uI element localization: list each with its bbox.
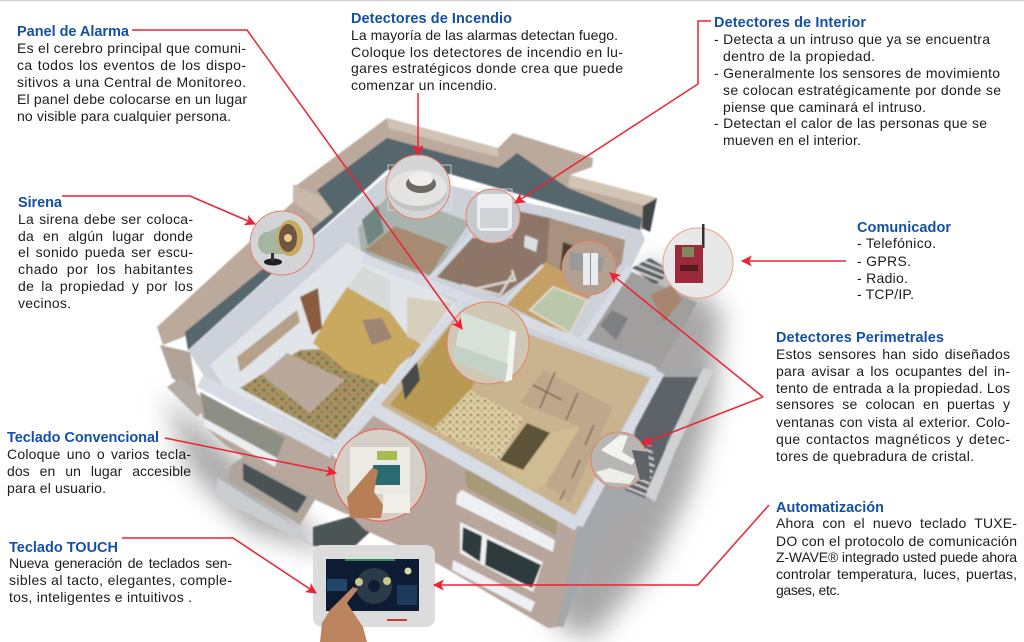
text: comunicador: - Telefónico. <box>857 235 936 251</box>
arrow: teclado touch <box>122 538 316 593</box>
text: sirena: La sirena debe ser coloca- <box>18 211 193 227</box>
text: teclado convencional: Teclado Convencional <box>7 430 159 446</box>
terrace on the right side <box>548 368 714 627</box>
text: automatizacion: gases, etc. <box>776 582 840 598</box>
text: sirena: Sirena <box>18 195 63 211</box>
callout: siren <box>250 211 314 275</box>
text: sirena: da en algún lugar donde <box>18 228 193 244</box>
lower floor left wing <box>160 345 372 546</box>
stair room <box>437 210 625 300</box>
text: detectores de incendio: Coloque los detectores de incendio en lu- <box>351 44 623 60</box>
text: detectores perimetrales: sensores se colocan en puertas y <box>776 396 1010 412</box>
callout: upper perimeter sensor <box>562 241 616 295</box>
text: detectores perimetrales: Detectores Perimetrales <box>776 330 944 346</box>
text: detectores perimetrales: tores de quebradura de cristal. <box>776 448 974 464</box>
text: panel de alarma: El panel debe colocarse en un lugar <box>17 91 247 107</box>
text: detectores de interior: se colocan estratégicamente por donde se <box>723 82 1001 98</box>
text: detectores de interior: Detectores de Interior <box>714 15 866 31</box>
text: panel de alarma: sitivos a una Central de Monitoreo. <box>17 74 246 90</box>
text: teclado convencional <box>7 430 191 496</box>
text: teclado touch: Teclado TOUCH <box>9 540 118 556</box>
callout: window contact sensor <box>591 432 650 488</box>
arrow: panel de alarma <box>132 30 462 329</box>
house drop shadows <box>165 260 722 640</box>
text: panel de alarma: no visible para cualquier persona. <box>17 108 231 124</box>
callout: alarm panel <box>447 302 529 384</box>
text: panel de alarma: Es el cerebro principal que comuni- <box>17 40 246 56</box>
text: teclado convencional: para el usuario. <box>7 480 106 496</box>
text: automatizacion: DO con el protocolo de comunicación <box>776 533 1017 549</box>
dark roof strip <box>185 138 642 350</box>
text: comunicador: - GPRS. <box>857 253 911 269</box>
text: comunicador: Comunicador <box>857 220 951 236</box>
text: detectores perimetrales: que contactos magnéticos y detec- <box>776 431 1010 447</box>
text: sirena: de la propiedad y por los <box>18 278 193 294</box>
green bed room <box>507 262 590 335</box>
text: sirena: el sonido pueda ser escu- <box>18 244 193 260</box>
text: teclado convencional: Coloque uno o varios tecla- <box>7 446 191 462</box>
text: detectores perimetrales: Estos sensores han sido diseñados <box>776 346 1010 362</box>
text: teclado convencional: dos en un lugar accesible <box>7 463 191 479</box>
lower floor front wall with windows <box>340 412 578 628</box>
text: detectores de interior: - Detecta a un intruso que ya se encuentra <box>714 31 990 47</box>
interior and exterior wall tops <box>200 230 660 525</box>
text: sirena: vecinos. <box>18 295 71 311</box>
text: automatizacion: Z-WAVE® integrado usted puede ahora <box>776 549 1017 565</box>
text: detectores de incendio: gares estratégicos donde crea que puede <box>351 60 623 76</box>
text: comunicador <box>857 220 951 302</box>
touch keypad <box>313 545 435 642</box>
text: comunicador: - TCP/IP. <box>857 286 914 302</box>
balcony <box>587 258 697 368</box>
arrow: automatizacion <box>434 505 769 585</box>
bedroom <box>210 243 458 442</box>
text: sirena: chado por los habitantes <box>18 261 193 277</box>
callout: conventional keypad <box>334 429 426 521</box>
text: automatizacion <box>776 500 1017 598</box>
cutaway house illustration <box>157 118 714 628</box>
text: sirena <box>18 195 193 311</box>
text: automatizacion: Ahora con el nuevo teclado TUXE- <box>776 515 1017 531</box>
upper floor wall ring <box>188 172 660 527</box>
text: panel de alarma: ca todos los eventos de los dispo- <box>17 57 246 73</box>
text: detectores de interior: - Detectan el calor de las personas que se <box>714 115 987 131</box>
arrows: detectores perimetrales <box>610 273 763 444</box>
text: detectores de incendio <box>351 11 623 93</box>
text: detectores de incendio: La mayoría de las alarmas detectan fuego. <box>351 27 618 43</box>
text: detectores de incendio: Detectores de Incendio <box>351 11 512 27</box>
text: comunicador: - Radio. <box>857 270 908 286</box>
arrow: teclado convencional <box>165 438 336 473</box>
callout: fire detector <box>386 155 451 219</box>
callout: communicator <box>663 224 733 298</box>
arrow: comunicador <box>742 260 846 262</box>
text: detectores perimetrales: ventanas con vista al exterior. Colo- <box>776 414 1010 430</box>
text: detectores de interior: piense que caminará el intruso. <box>723 99 926 115</box>
living room <box>380 310 650 515</box>
text: detectores perimetrales <box>776 330 1010 464</box>
text: teclado touch: sibles al tacto, elegantes, comple- <box>9 572 232 588</box>
text: panel de alarma: Panel de Alarma <box>17 24 130 40</box>
text: panel de alarma <box>17 24 247 124</box>
back left room <box>358 192 470 277</box>
arrow: detectores de interior <box>515 21 711 203</box>
text: detectores de interior: dentro de la propiedad. <box>723 48 875 64</box>
text: detectores de interior <box>714 15 1001 148</box>
arrow: detectores de incendio <box>417 93 419 155</box>
text: detectores de interior: - Generalmente los sensores de movimiento <box>714 65 1000 81</box>
text: detectores de interior: mueven en el interior. <box>723 132 861 148</box>
arrow: sirena <box>62 196 255 224</box>
callout: motion detector <box>466 189 520 243</box>
text: detectores de incendio: comenzar un incendio. <box>351 77 497 93</box>
text: detectores perimetrales: para avisar a los ocupantes del in- <box>776 363 1010 379</box>
text: teclado touch: Nueva generación de teclados sen- <box>9 555 232 571</box>
roof parapet <box>157 118 657 345</box>
text: automatizacion: Automatización <box>776 500 884 516</box>
text: detectores perimetrales: tento de entrada a la propiedad. Los <box>776 380 1010 396</box>
text: teclado touch: tos, inteligentes e intuitivos . <box>9 589 192 605</box>
text: teclado touch <box>9 540 232 605</box>
text: automatizacion: controlar temperatura, luces, puertas, <box>776 566 1017 582</box>
